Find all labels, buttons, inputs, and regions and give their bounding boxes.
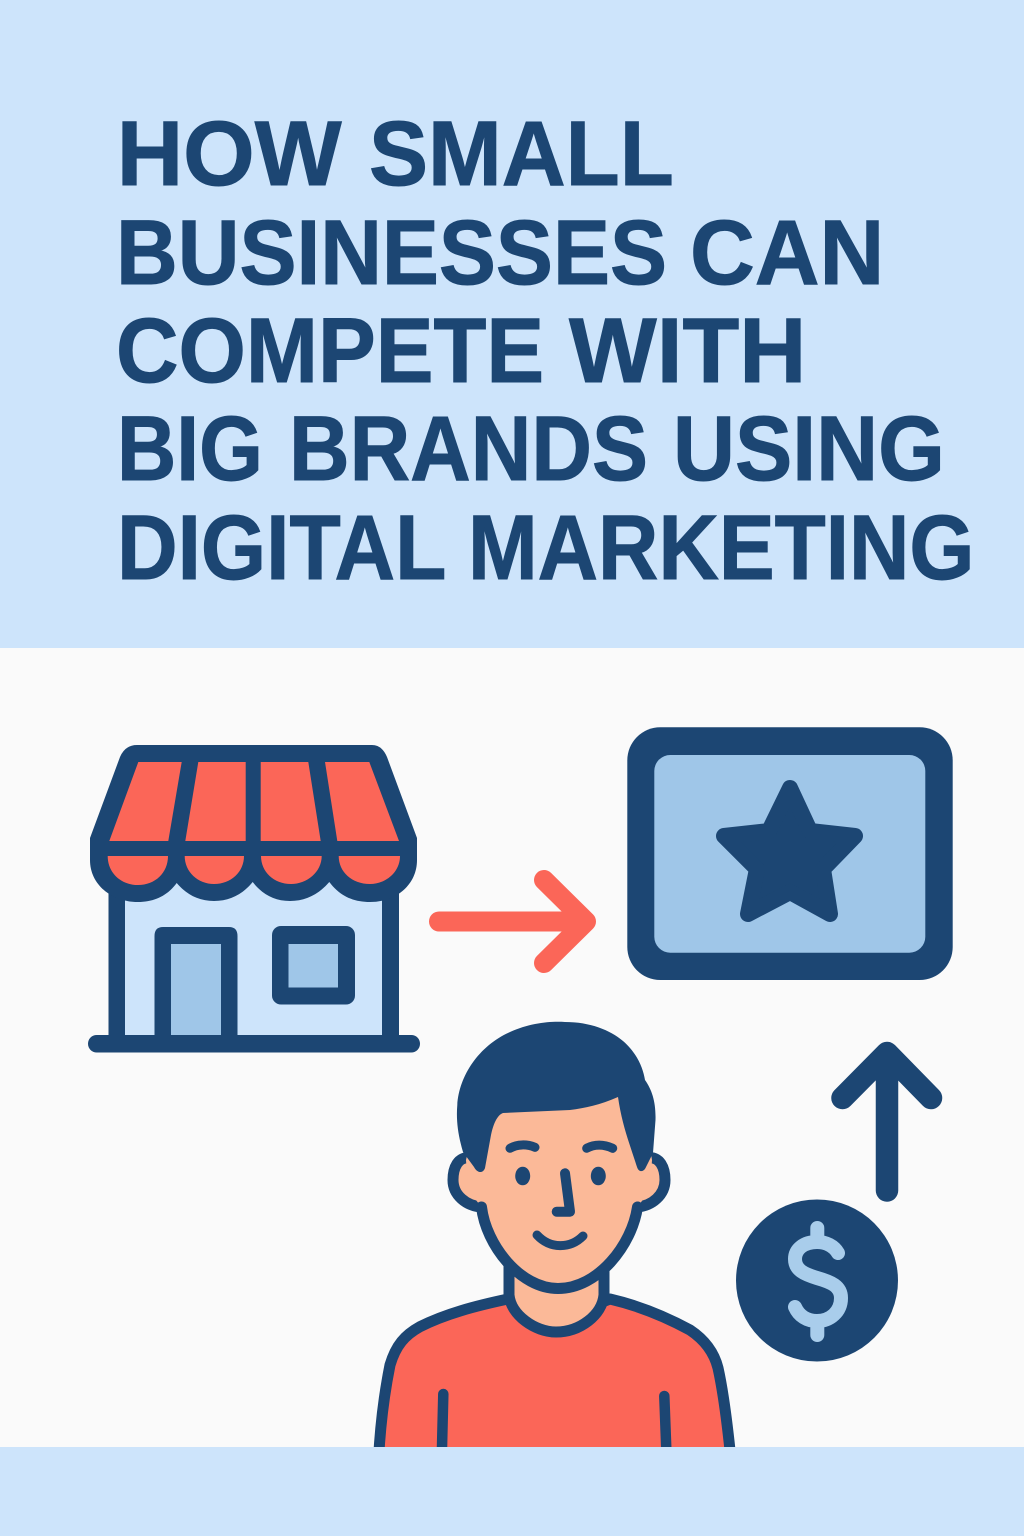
top header band [0,0,1024,648]
bottom band [0,1447,1024,1536]
arrow: store to screen [439,880,586,963]
title: BIG [117,398,263,500]
face [466,1085,652,1288]
torso [378,1299,731,1460]
title: HOW [117,103,342,205]
icon: screen with star [627,727,953,980]
mouth [537,1235,583,1246]
title: BUSINESSES [116,202,667,304]
title: USING [673,398,945,500]
title: MARKETING [468,497,974,599]
ears [453,1158,665,1207]
title: WITH [569,300,806,402]
title: CAN [690,202,884,304]
title: COMPETE [116,300,544,402]
eyebrows [510,1145,613,1148]
icon: storefront [88,745,420,1052]
hair [457,1022,656,1172]
icon: dollar coin [736,1200,898,1362]
title: BRANDS [289,398,648,500]
eyes [515,1167,530,1185]
arrow: upward [842,1053,931,1190]
person illustration [378,1022,731,1460]
nose [557,1173,570,1212]
title [116,103,974,599]
neck [509,1262,604,1332]
title: SMALL [369,103,673,205]
title: DIGITAL [117,497,446,599]
jaw line [482,1207,638,1288]
sleeve creases [442,1394,667,1460]
